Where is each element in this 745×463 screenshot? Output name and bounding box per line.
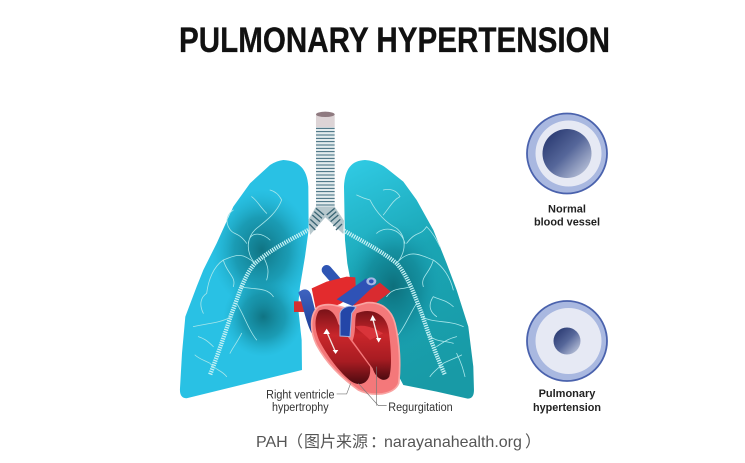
lungs and heart illustration <box>180 112 474 414</box>
caption: 图片来源 <box>304 433 368 451</box>
vessel: normal <box>527 114 607 228</box>
vessel: pulmonary hypertension <box>527 301 607 414</box>
vessel: pulmonary hypertension: hypertension <box>533 402 601 414</box>
flow arrows <box>327 318 378 351</box>
right airway branches <box>344 189 465 377</box>
title: PULMONARY HYPERTENSION <box>179 21 610 60</box>
heart <box>294 270 400 394</box>
caption: ） <box>525 433 541 451</box>
great vessels <box>327 270 338 283</box>
lungs and heart illustration: hypertrophy <box>272 400 329 414</box>
caption: narayanahealth.org <box>384 434 522 451</box>
label: right ventricle hypertrophy: Right ventricle <box>266 388 335 402</box>
label: pulmonary hypertension: Pulmonary <box>539 388 596 400</box>
infographic canvas <box>180 27 608 450</box>
caption: PAH <box>256 434 288 451</box>
valve flap <box>355 326 383 340</box>
trachea <box>308 112 344 235</box>
left airway branches <box>193 190 308 377</box>
leader lines <box>337 367 387 406</box>
caption: （ <box>287 433 303 451</box>
heart wall <box>312 303 400 394</box>
label: regurgitation: Regurgitation <box>388 400 453 414</box>
left lung <box>180 160 312 398</box>
right ventricle chamber <box>316 309 370 384</box>
pulmonary artery inner <box>340 306 356 337</box>
caption: ： <box>370 434 386 451</box>
vessel: normal: blood vessel <box>534 216 600 228</box>
label: normal blood vessel: Normal <box>548 204 586 216</box>
right lung <box>343 160 474 399</box>
left ventricle chamber <box>353 311 391 380</box>
